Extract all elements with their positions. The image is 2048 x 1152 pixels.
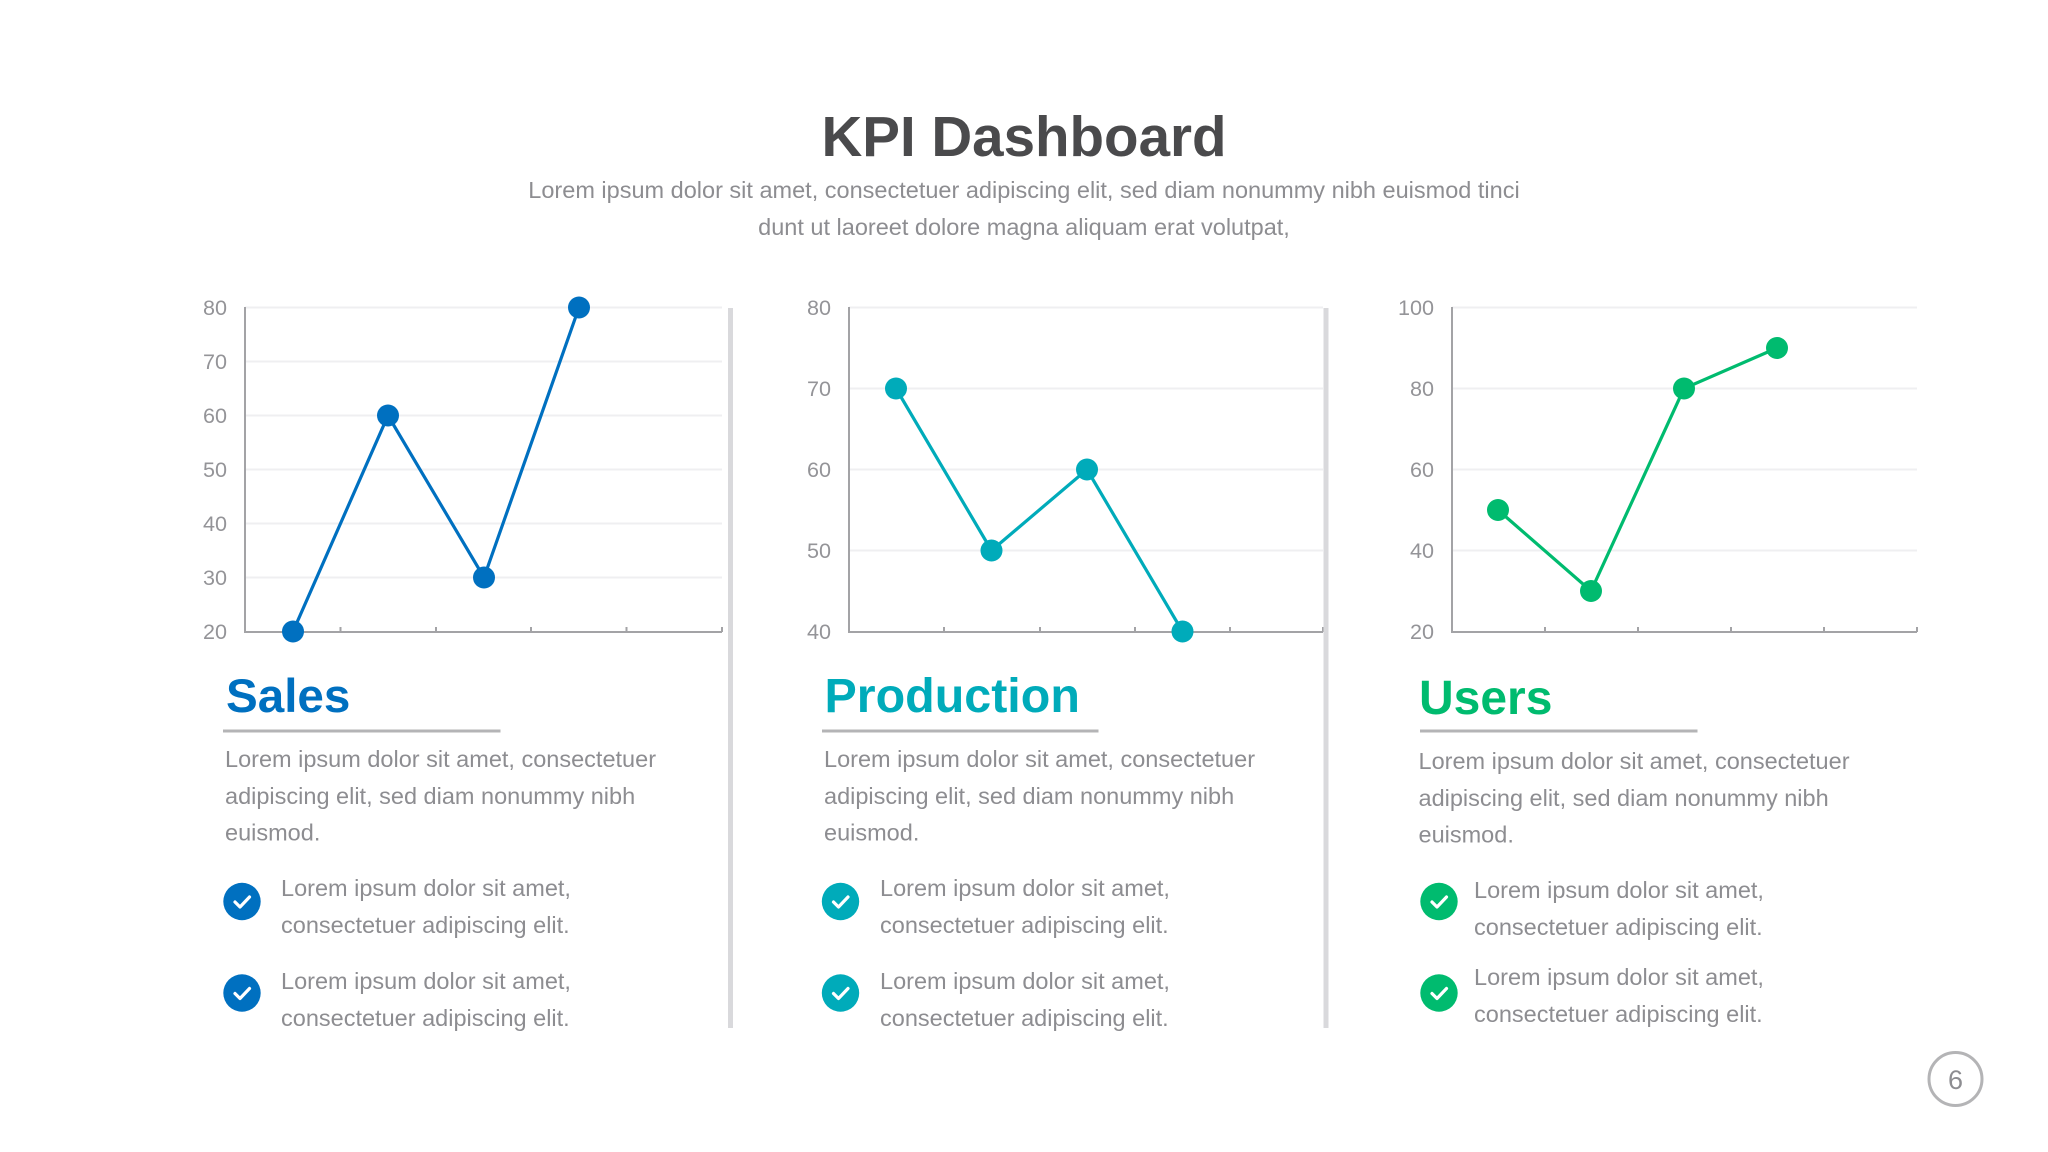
list item: production 1: consectetuer adipiscing elit.	[880, 912, 1169, 938]
text block: sales description	[225, 746, 656, 846]
list item: users 2: Lorem ipsum dolor sit amet,	[1474, 964, 1764, 990]
list item: production 2	[880, 968, 1170, 1031]
text block: production description: euismod.	[824, 820, 919, 846]
list item: production 2: Lorem ipsum dolor sit amet,	[880, 968, 1170, 994]
text block: sales description: adipiscing elit, sed diam nonummy nibh	[225, 783, 635, 809]
icon: check 2	[223, 974, 261, 1012]
line chart: sales: 70	[203, 349, 227, 374]
list item: users 1: consectetuer adipiscing elit.	[1474, 914, 1763, 940]
panel: sales	[203, 295, 722, 1031]
text block: sales description: euismod.	[225, 820, 320, 846]
line chart: sales: 20	[203, 619, 227, 644]
list item: sales 1: Lorem ipsum dolor sit amet,	[281, 875, 571, 901]
title: KPI Dashboard	[822, 105, 1226, 168]
list item: production 1	[880, 875, 1170, 938]
line chart: sales: 40	[203, 511, 227, 536]
line chart: sales: 80	[203, 295, 227, 320]
heading underline: production	[822, 730, 1098, 732]
list item: users 2	[1474, 964, 1764, 1027]
list item: users 1: Lorem ipsum dolor sit amet,	[1474, 877, 1764, 903]
page number: 6	[1948, 1065, 1963, 1095]
line chart: sales	[203, 295, 722, 644]
line chart: production: 50	[807, 538, 831, 563]
heading: sales: Sales	[226, 670, 350, 723]
panel: users	[1398, 295, 1917, 1027]
text block: users description: Lorem ipsum dolor sit amet, consectetuer	[1418, 748, 1850, 774]
text block: production description: Lorem ipsum dolor sit amet, consectetuer	[824, 746, 1255, 772]
list item: sales 2: consectetuer adipiscing elit.	[281, 1005, 570, 1031]
icon: check 2	[1420, 974, 1458, 1012]
line chart: users: 60	[1410, 457, 1434, 482]
line chart: sales: 60	[203, 403, 227, 428]
page number	[1929, 1052, 1982, 1106]
list item: sales 2	[281, 968, 571, 1031]
text block: production description: adipiscing elit, sed diam nonummy nibh	[824, 783, 1234, 809]
panel: production	[807, 295, 1323, 1031]
text block: production description	[824, 746, 1255, 846]
subtitle: dunt ut laoreet dolore magna aliquam erat volutpat,	[758, 214, 1290, 240]
line chart: users: 80	[1410, 376, 1434, 401]
text block: users description	[1418, 748, 1850, 848]
heading: production: Production	[824, 669, 1080, 723]
text block: users description: adipiscing elit, sed diam nonummy nibh	[1418, 785, 1829, 811]
divider 1	[728, 308, 733, 1028]
line chart: users: 100	[1398, 295, 1434, 320]
line chart: users: 40	[1410, 538, 1434, 563]
line chart: production	[807, 295, 1323, 644]
line chart: production: 60	[807, 457, 831, 482]
list item: sales 1	[281, 875, 571, 938]
list item: production 2: consectetuer adipiscing elit.	[880, 1005, 1169, 1031]
list item: users 1	[1474, 877, 1764, 940]
line chart: production: 70	[807, 376, 831, 401]
line chart: users: 20	[1410, 619, 1434, 644]
list item: sales 1: consectetuer adipiscing elit.	[281, 912, 570, 938]
line chart: sales: 30	[203, 565, 227, 590]
heading underline: sales	[223, 730, 500, 732]
list item: users 2: consectetuer adipiscing elit.	[1474, 1001, 1763, 1027]
subtitle: Lorem ipsum dolor sit amet, consectetuer adipiscing elit, sed diam nonummy nibh euismod tinci	[528, 177, 1520, 203]
icon: check 1	[822, 883, 859, 920]
line chart: sales: 50	[203, 457, 227, 482]
list item: sales 2: Lorem ipsum dolor sit amet,	[281, 968, 571, 994]
line chart: production: 80	[807, 295, 831, 320]
text block: users description: euismod.	[1418, 822, 1514, 848]
icon: check 1	[223, 883, 261, 920]
icon: check 2	[822, 974, 859, 1012]
list item: production 1: Lorem ipsum dolor sit amet,	[880, 875, 1170, 901]
heading underline: users	[1420, 730, 1698, 732]
line chart: users	[1398, 295, 1917, 644]
line chart: production: 40	[807, 619, 831, 644]
heading: users: Users	[1419, 672, 1552, 725]
text block: sales description: Lorem ipsum dolor sit amet, consectetuer	[225, 746, 656, 772]
subtitle	[528, 177, 1520, 240]
divider 2	[1324, 308, 1328, 1028]
icon: check 1	[1420, 883, 1458, 920]
